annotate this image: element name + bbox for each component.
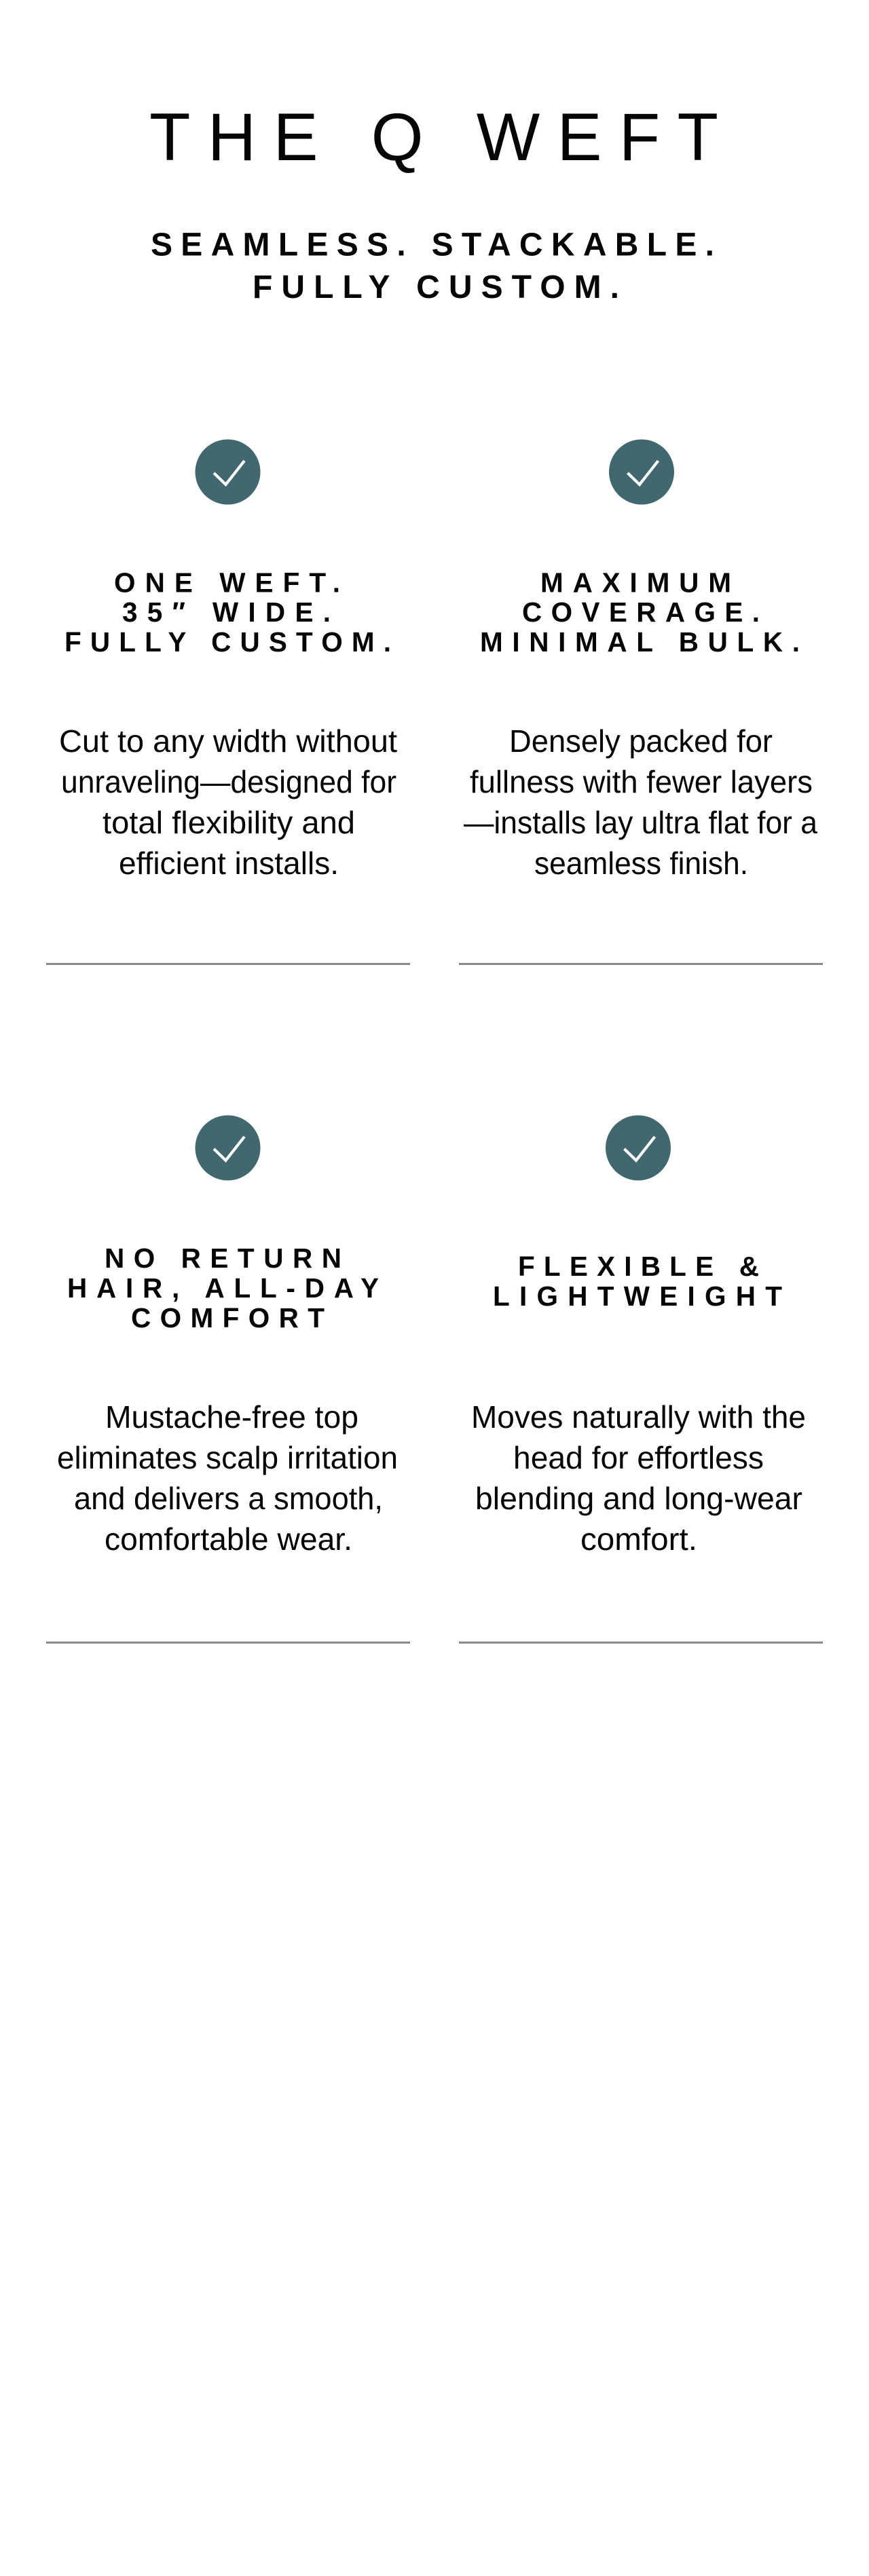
panel: flexible and lightweight [459,1116,823,1642]
subtitle: SEAMLESS. STACKABLE. [151,227,714,263]
panel: maximum coverage [459,440,823,964]
text: flexible and lightweight description: blending and long-wear [475,1481,802,1516]
heading: no return hair: HAIR, ALL-DAY [67,1272,379,1304]
text: maximum coverage description [464,723,817,881]
icon: check mark [609,440,674,505]
heading: maximum coverage: COVERAGE. [522,596,760,628]
heading: flexible and lightweight: LIGHTWEIGHT [493,1281,782,1312]
text: no return hair description: Mustache-free top [105,1399,358,1435]
heading: flexible and lightweight [493,1251,782,1312]
heading: no return hair [67,1243,379,1333]
icon: check mark [606,1116,671,1181]
text: one weft description: efficient installs. [119,846,339,881]
text: flexible and lightweight description [471,1399,806,1557]
subtitle [151,227,714,305]
heading: one weft: 35″ WIDE. [122,596,331,628]
subtitle: FULLY CUSTOM. [253,269,619,305]
title: THE Q WEFT [149,99,718,174]
text: no return hair description: and delivers a smooth, [74,1481,383,1516]
panel: no return hair [46,1116,410,1642]
heading: one weft [64,567,391,658]
icon: check mark [196,1116,261,1181]
text: flexible and lightweight description: comfort. [580,1521,697,1557]
text: flexible and lightweight description: Moves naturally with the [471,1399,806,1435]
heading: maximum coverage [480,567,800,658]
panel: one weft [46,440,410,964]
heading: no return hair: COMFORT [131,1302,325,1333]
icon: check mark [196,440,261,505]
heading: one weft: ONE WEFT. [114,567,340,599]
text: no return hair description [57,1399,398,1557]
heading: maximum coverage: MINIMAL BULK. [480,626,800,658]
text: maximum coverage description: Densely packed for [509,723,773,759]
heading: flexible and lightweight: FLEXIBLE & [518,1251,759,1282]
heading: maximum coverage: MAXIMUM [540,567,731,599]
text: one weft description [59,723,397,881]
text: maximum coverage description: —installs lay ultra flat for a [464,805,817,840]
text: no return hair description: comfortable wear. [105,1521,352,1557]
text: one weft description: total flexibility and [103,805,355,840]
text: flexible and lightweight description: head for effortless [513,1440,764,1475]
heading: no return hair: NO RETURN [105,1243,341,1274]
text: maximum coverage description: fullness with fewer layers [470,764,813,799]
text: one weft description: Cut to any width without [59,723,397,759]
heading: one weft: FULLY CUSTOM. [64,626,391,658]
text: one weft description: unraveling—designed for [61,764,396,799]
text: maximum coverage description: seamless finish. [534,846,748,881]
text: no return hair description: eliminates scalp irritation [57,1440,398,1475]
